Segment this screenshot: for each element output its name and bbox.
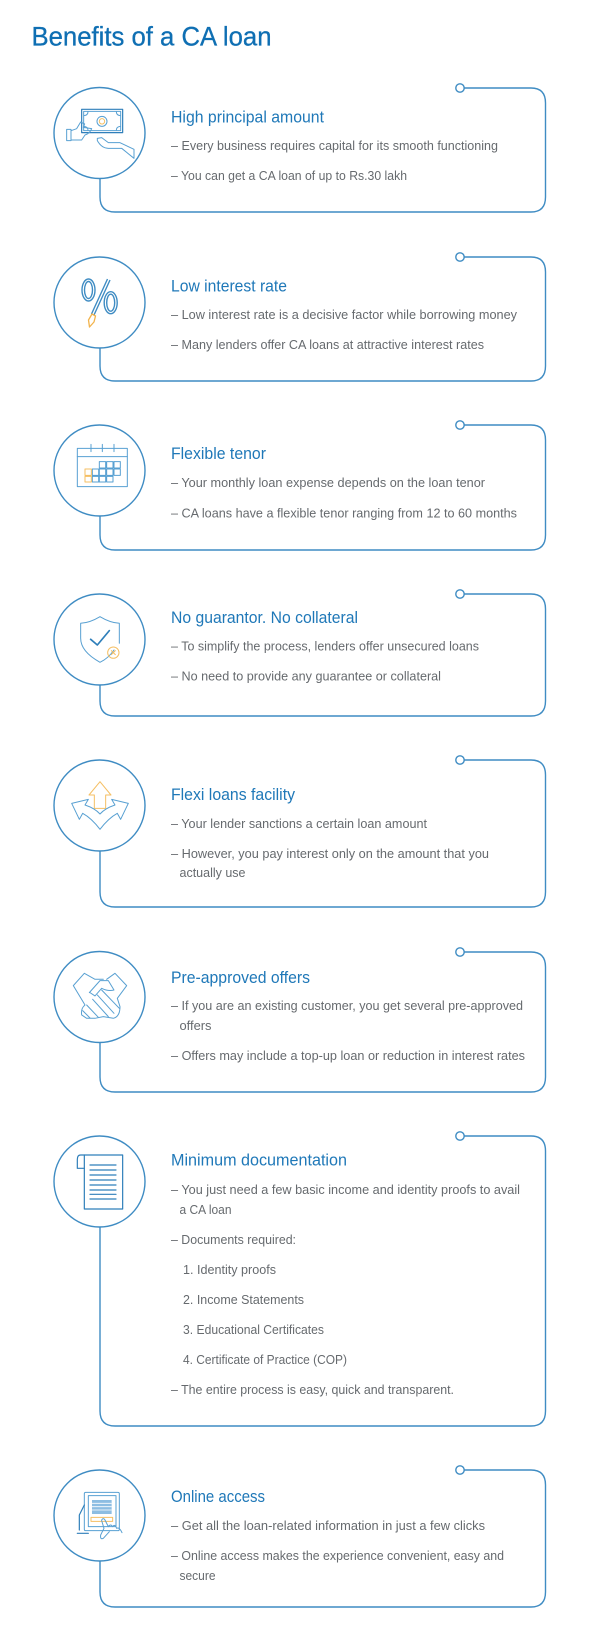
- icon: money in hands: [67, 109, 134, 158]
- card outline: [100, 88, 546, 212]
- connector dot: [456, 1466, 464, 1474]
- bullet text: – Get all the loan-related information in just a few clicks: [171, 1518, 485, 1533]
- panel: low interest rate: [54, 253, 546, 381]
- icon: branching arrows: [72, 782, 128, 829]
- bullet text: – Every business requires capital for its smooth functioning: [171, 138, 498, 153]
- heading: Flexi loans facility: [171, 786, 296, 804]
- bullet text: [171, 307, 517, 352]
- bullet text: – Low interest rate is a decisive factor while borrowing money: [171, 307, 517, 322]
- heading: Minimum documentation: [171, 1152, 347, 1170]
- panel: flexi loans facility: [54, 756, 546, 907]
- icon: calendar: [77, 444, 127, 487]
- title: Benefits of a CA loan: [32, 22, 272, 52]
- icon: shield: [81, 617, 119, 662]
- bullet text: 1. Identity proofs: [183, 1262, 276, 1277]
- heading: No guarantor. No collateral: [171, 609, 358, 627]
- bullet text: – Many lenders offer CA loans at attractive interest rates: [171, 337, 484, 352]
- bullet text: – Online access makes the experience convenient, easy and: [171, 1548, 504, 1563]
- heading: Flexible tenor: [171, 445, 266, 463]
- connector dot: [456, 84, 464, 92]
- icon circle: [54, 88, 145, 178]
- bullet text: offers: [180, 1018, 212, 1033]
- connector dot: [456, 590, 464, 598]
- card outline: [100, 1136, 546, 1426]
- card outline: [100, 425, 546, 550]
- card outline: [100, 952, 546, 1092]
- card outline: [100, 1470, 546, 1607]
- bullet text: 4. Certificate of Practice (COP): [183, 1352, 347, 1367]
- bullet text: – If you are an existing customer, you get several pre-approved: [171, 998, 523, 1013]
- heading: Low interest rate: [171, 278, 287, 296]
- connector dot: [456, 948, 464, 956]
- icon circle: [54, 257, 145, 348]
- panel: online access: [54, 1466, 546, 1607]
- heading: Pre-approved offers: [171, 969, 310, 987]
- bullet text: [171, 475, 517, 520]
- bullet text: [171, 816, 489, 880]
- bullet text: – Documents required:: [171, 1232, 296, 1247]
- bullet text: – CA loans have a flexible tenor ranging from 12 to 60 months: [171, 506, 517, 520]
- icon circle: [54, 1136, 145, 1227]
- icon: handshake: [73, 973, 127, 1018]
- card outline: [100, 760, 546, 907]
- icon circle: [54, 1470, 145, 1561]
- bullet text: – To simplify the process, lenders offer unsecured loans: [171, 638, 479, 654]
- bullet text: – Your lender sanctions a certain loan amount: [171, 816, 427, 831]
- bullet text: [171, 1518, 504, 1583]
- bullet text: [171, 638, 479, 684]
- bullet text: secure: [180, 1568, 216, 1583]
- icon circle: [54, 594, 145, 685]
- bullet text: 2. Income Statements: [183, 1292, 304, 1307]
- heading: High principal amount: [171, 108, 324, 126]
- icon circle: [54, 425, 145, 516]
- icon: document: [77, 1155, 123, 1209]
- panel: flexible tenor: [54, 421, 546, 550]
- bullet text: 3. Educational Certificates: [183, 1322, 324, 1337]
- panel: no guarantor, no collateral: [54, 590, 546, 716]
- panel: high principal amount: [54, 84, 546, 212]
- icon circle: [54, 952, 145, 1042]
- card outline: [100, 594, 546, 716]
- icon circle: [54, 760, 145, 851]
- connector dot: [456, 421, 464, 429]
- heading: Online access: [171, 1488, 265, 1506]
- bullet text: a CA loan: [180, 1202, 232, 1217]
- bullet text: – However, you pay interest only on the amount that you: [171, 846, 489, 861]
- bullet text: – No need to provide any guarantee or collateral: [171, 668, 441, 684]
- bullet text: – Offers may include a top-up loan or reduction in interest rates: [171, 1048, 525, 1063]
- bullet text: [171, 138, 498, 183]
- bullet text: – You can get a CA loan of up to Rs.30 lakh: [171, 168, 407, 183]
- bullet text: – Your monthly loan expense depends on the loan tenor: [171, 475, 486, 490]
- icon: tablet and hand: [77, 1492, 122, 1539]
- icon: percent and pen: [82, 279, 117, 327]
- panel: minimum documentation: [54, 1132, 546, 1426]
- bullet text: [171, 1182, 520, 1397]
- bullet text: – You just need a few basic income and identity proofs to avail: [171, 1182, 520, 1197]
- connector dot: [456, 1132, 464, 1140]
- connector dot: [456, 253, 464, 261]
- bullet text: [171, 998, 525, 1063]
- bullet text: actually use: [180, 865, 246, 880]
- bullet text: – The entire process is easy, quick and transparent.: [171, 1382, 454, 1397]
- panel: pre-approved offers: [54, 948, 546, 1092]
- card outline: [100, 257, 546, 381]
- connector dot: [456, 756, 464, 764]
